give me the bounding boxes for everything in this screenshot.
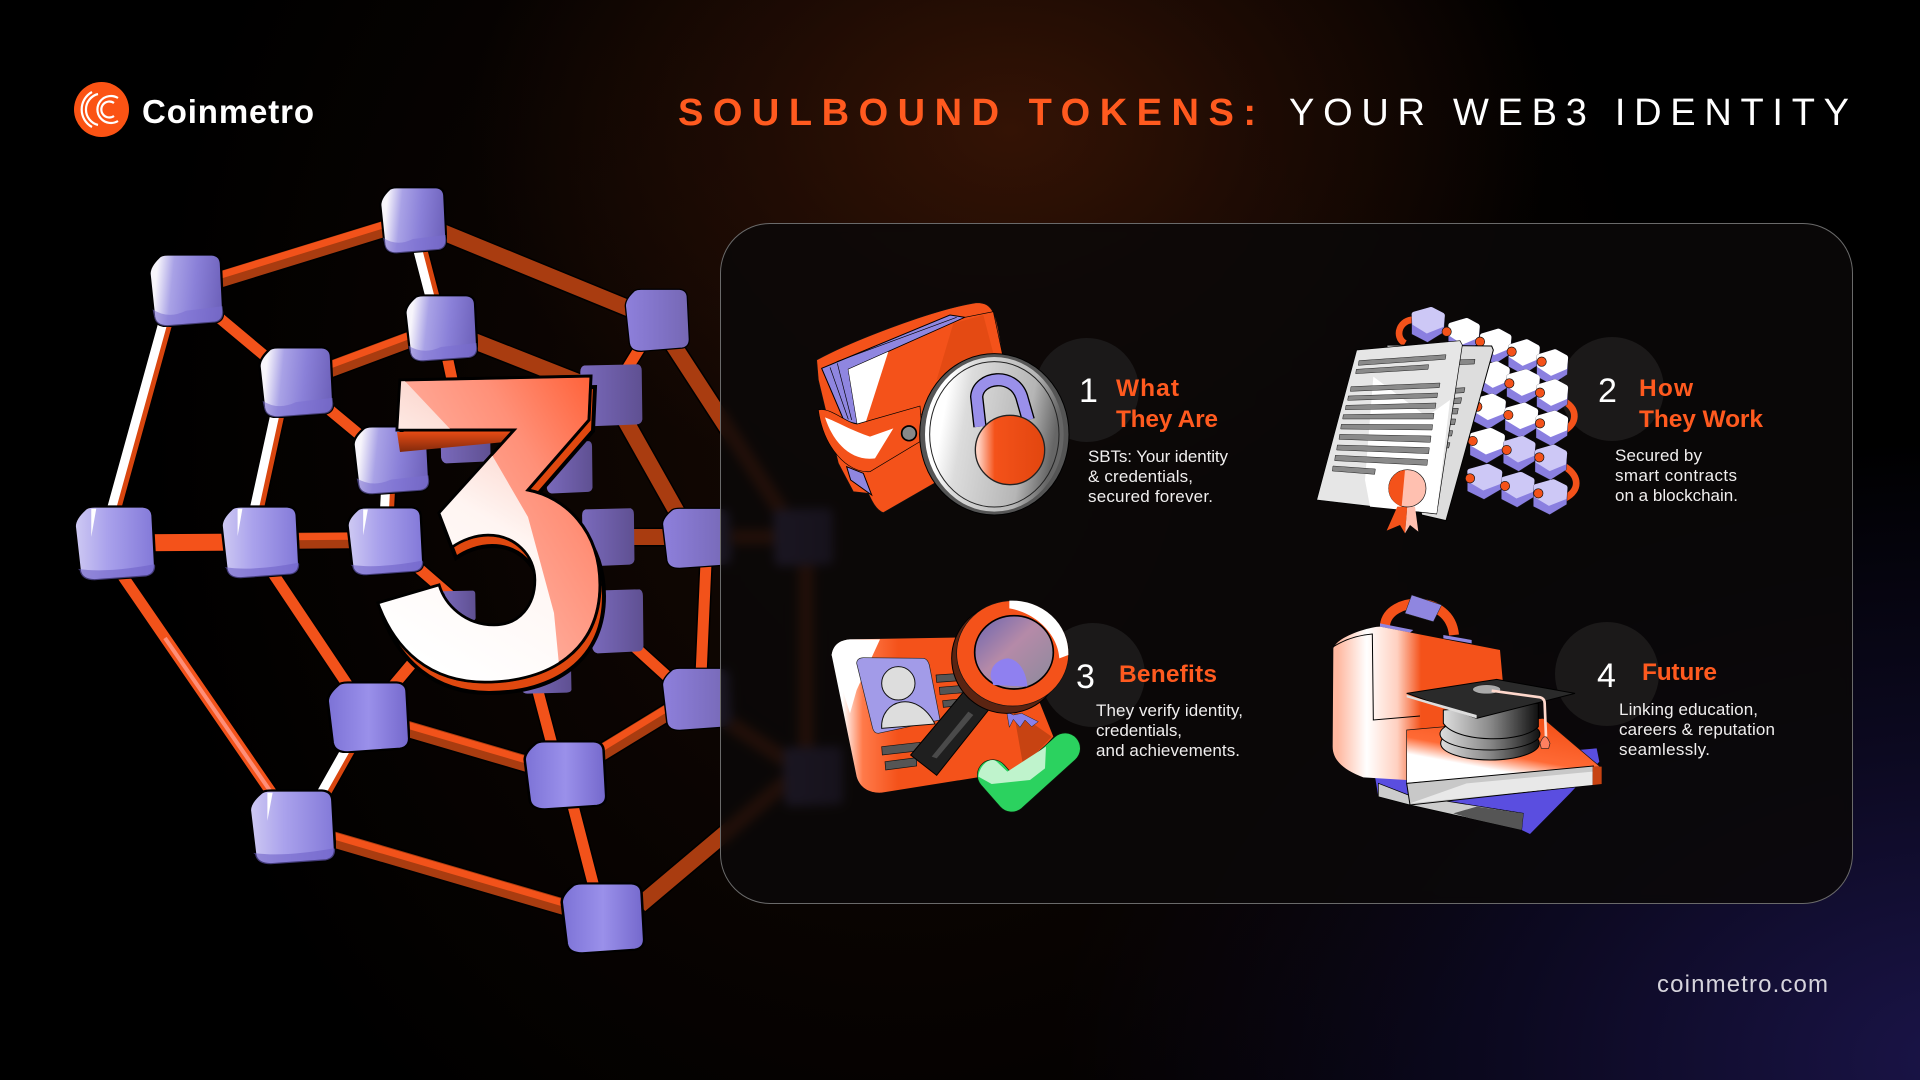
number 1: 1 [1079, 372, 1098, 410]
card 1: what they are [817, 303, 1228, 515]
title accent: SOULBOUND TOKENS: [678, 92, 1256, 134]
description 1: SBTs: Your identity [1088, 447, 1228, 466]
connector rods white [102, 220, 441, 827]
number 2: 2 [1598, 372, 1617, 410]
panel: four facts card [720, 223, 1853, 904]
description 3: They verify identity, [1096, 701, 1243, 720]
description 4: seamlessly. [1619, 740, 1710, 759]
number 3 label: 3 [1076, 658, 1095, 696]
logo icon [74, 82, 129, 137]
description 1: & credentials, [1088, 467, 1193, 486]
description 2: smart contracts [1615, 466, 1737, 485]
network of cubes with numeral 3 [76, 188, 844, 952]
heading: what they are: What [1116, 375, 1179, 402]
number circle 1 [1035, 338, 1139, 442]
number circle 4 [1555, 622, 1659, 726]
icon: wallet and lock coin [817, 303, 1069, 515]
website url: coinmetro.com [1657, 971, 1828, 998]
icon: documents and chain of cubes [1317, 307, 1576, 533]
card 4: future [1333, 595, 1775, 834]
connector rods bright orange [100, 290, 707, 918]
description 1: secured forever. [1088, 487, 1213, 506]
connector rods dark orange [185, 216, 812, 918]
heading: how they work: How [1639, 375, 1694, 402]
heading: how they work: They Work [1639, 406, 1763, 433]
cubes [75, 187, 732, 953]
number 4: 4 [1597, 657, 1616, 695]
card 3: benefits [832, 601, 1243, 797]
heading: benefits: Benefits [1119, 661, 1217, 688]
description 2: Secured by [1615, 446, 1702, 465]
description 3: credentials, [1096, 721, 1182, 740]
card 2: how they work [1317, 307, 1763, 533]
number circle 2 [1560, 337, 1664, 441]
numeral 3 [360, 376, 604, 700]
number circle 3 [1041, 623, 1145, 727]
heading: what they are: They Are [1116, 406, 1218, 433]
heading: future: Future [1642, 659, 1717, 686]
description 4: Linking education, [1619, 700, 1758, 719]
cubes behind the numeral [440, 364, 843, 806]
icon: briefcase, books and graduation cap [1333, 595, 1602, 834]
logo [74, 82, 314, 137]
description 3: and achievements. [1096, 741, 1240, 760]
description 2: on a blockchain. [1615, 486, 1738, 505]
icon: id card, magnifier and check [832, 601, 1069, 797]
description 4: careers & reputation [1619, 720, 1775, 739]
logo wordmark: Coinmetro [142, 93, 314, 130]
title [678, 92, 1849, 134]
title main: YOUR WEB3 IDENTITY [1289, 92, 1849, 134]
